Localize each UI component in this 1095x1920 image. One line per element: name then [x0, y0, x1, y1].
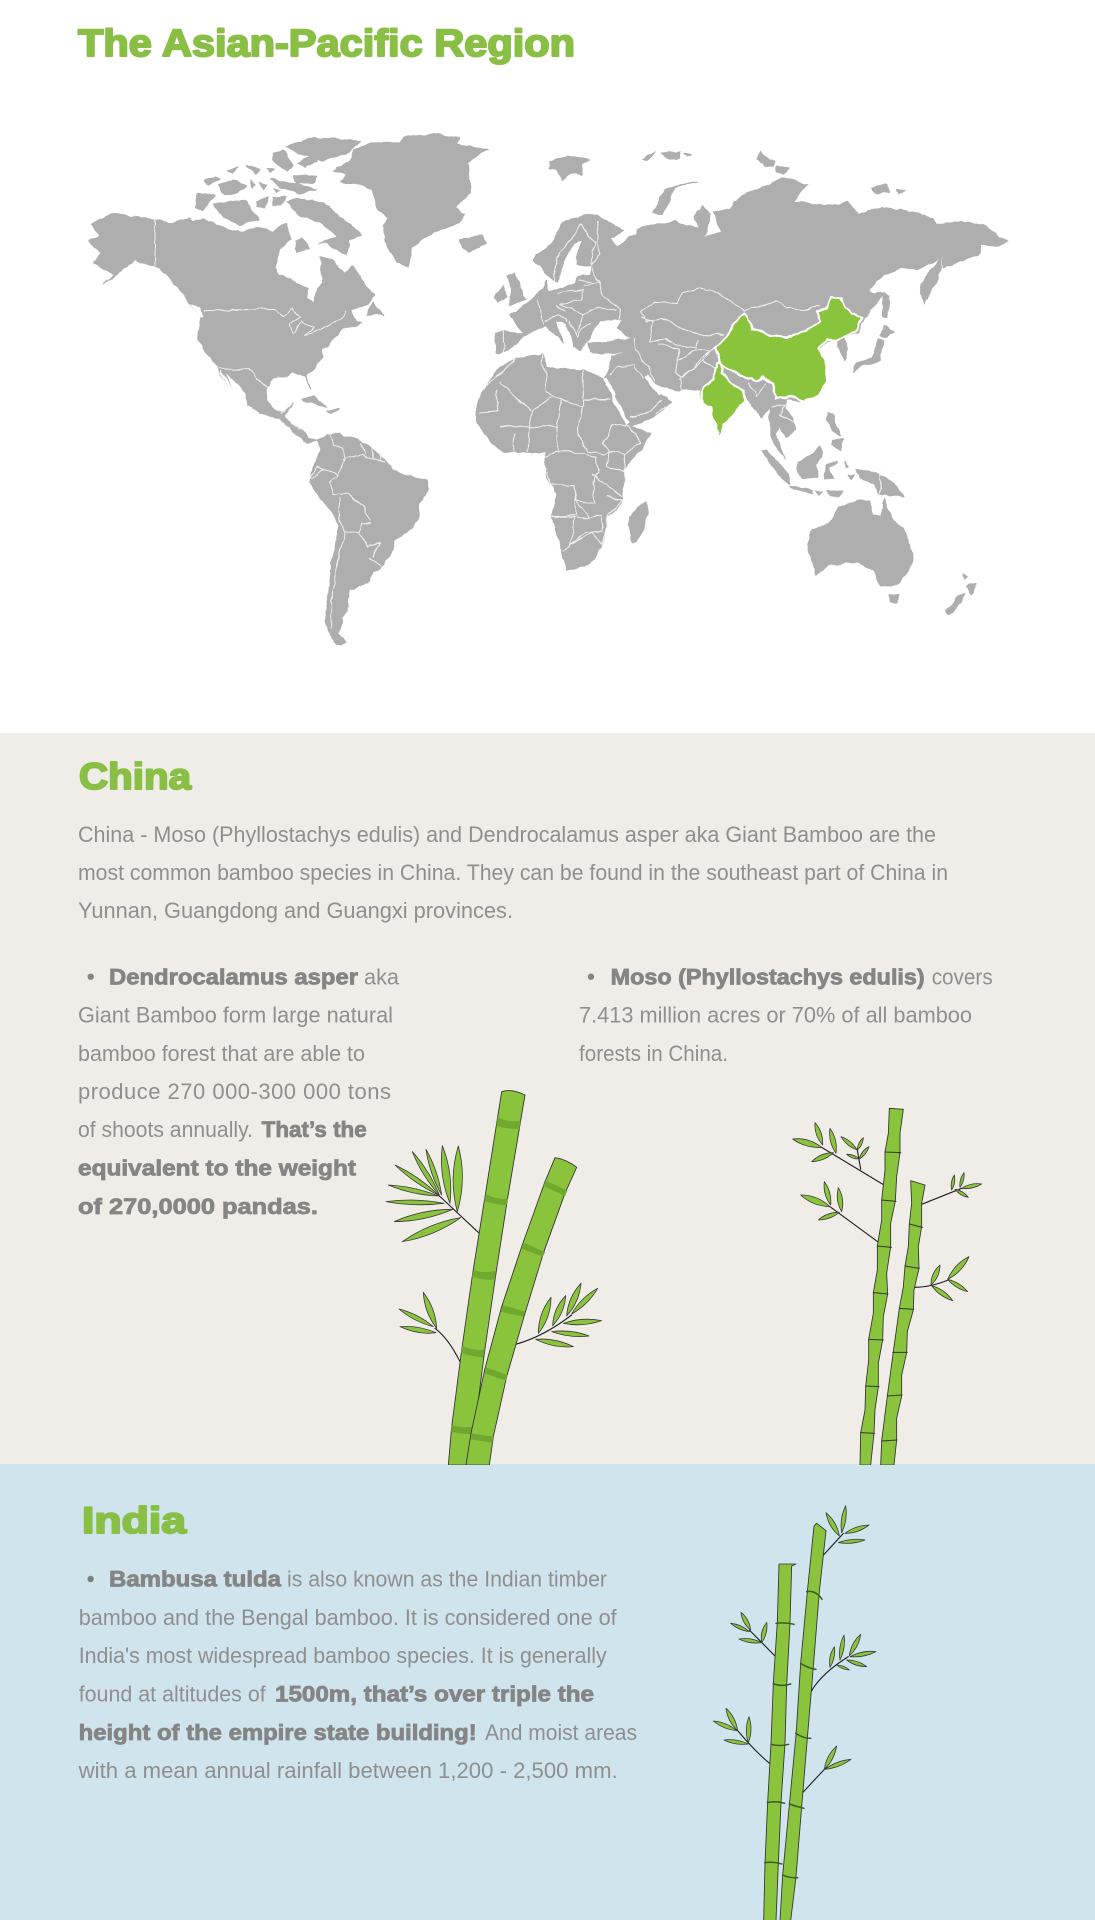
text block: dendrocalamus asper: of shoots annually.	[78, 1117, 253, 1142]
text block: bambusa tulda: is also known as the Indian timber	[287, 1567, 607, 1592]
stem two nodes	[882, 1224, 922, 1441]
text block: dendrocalamus asper: Giant Bamboo form large natural	[78, 1003, 393, 1028]
text block: china intro: most common bamboo species in China. They can be found in the southeast part of China in	[78, 860, 948, 885]
highlighted country: china	[715, 296, 863, 402]
arctic islands and caribbean	[195, 137, 525, 414]
text block: dendrocalamus asper: bamboo forest that are able to	[78, 1041, 365, 1066]
asian and oceanian islands	[549, 152, 977, 614]
text block: bambusa tulda: found at altitudes of	[79, 1682, 267, 1707]
stem one	[860, 1108, 903, 1465]
stem two	[780, 1523, 826, 1920]
short stem nodes	[471, 1181, 567, 1443]
text block: dendrocalamus asper: of 270,0000 pandas.	[78, 1194, 318, 1219]
text block: dendrocalamus asper: Dendrocalamus asper	[109, 964, 358, 990]
bamboo branches	[435, 1195, 572, 1362]
map: eurasia africa oceania	[477, 152, 1008, 614]
text block: dendrocalamus asper: produce 270 000-300 000 tons	[78, 1079, 391, 1104]
text block: dendrocalamus asper: That’s the	[262, 1117, 367, 1142]
text block: bambusa tulda: with a mean annual rainfall between 1,200 - 2,500 mm.	[78, 1758, 618, 1783]
panel: china background	[0, 733, 1095, 1465]
text block: moso: 7.413 million acres or 70% of all bamboo	[579, 1003, 972, 1028]
stem one nodes	[861, 1152, 901, 1433]
bamboo branches	[822, 1147, 962, 1287]
panel: india background	[0, 1464, 1095, 1920]
text block: dendrocalamus asper: aka	[364, 964, 400, 990]
title: The Asian-Pacific Region	[78, 23, 575, 65]
heading: india: India	[82, 1500, 187, 1541]
map: americas and atlantic	[88, 134, 525, 645]
text block: bambusa tulda: Bambusa tulda	[109, 1567, 282, 1592]
text block: bambusa tulda: bamboo and the Bengal bamboo. It is considered one of	[79, 1605, 618, 1630]
greenland	[333, 134, 488, 266]
text block: china intro: China - Moso (Phyllostachys edulis) and Dendrocalamus asper aka Giant Bamboo are the	[78, 822, 936, 847]
text block: dendrocalamus asper: equivalent to the weight	[78, 1156, 357, 1181]
illustration: giant bamboo	[386, 1091, 602, 1465]
south america landmass	[310, 434, 428, 645]
eurasia landmass	[497, 178, 1008, 459]
bamboo leaves	[386, 1146, 602, 1347]
stem one	[764, 1564, 796, 1920]
text block: bambusa tulda: height of the empire state building!	[79, 1720, 477, 1745]
stem one nodes	[765, 1623, 794, 1864]
bamboo leaves	[793, 1123, 982, 1301]
heading: china: China	[79, 756, 191, 797]
text block: china intro: Yunnan, Guangdong and Guangxi provinces.	[78, 898, 513, 923]
stem two nodes	[783, 1591, 822, 1878]
text block: dendrocalamus asper	[78, 964, 400, 1219]
world map	[88, 134, 1008, 645]
text block: moso: Moso (Phyllostachys edulis)	[611, 964, 925, 990]
seas	[603, 376, 662, 426]
bamboo branches	[738, 1533, 848, 1793]
illustration: indian timber bamboo	[713, 1506, 876, 1920]
text block: bambusa tulda	[78, 1567, 637, 1783]
highlighted country: india	[701, 361, 745, 439]
text block: bambusa tulda: India's most widespread bamboo species. It is generally	[79, 1643, 607, 1668]
text block: bambusa tulda: 1500m, that’s over triple the	[275, 1682, 594, 1707]
text block: moso	[579, 964, 993, 1066]
stem nodes	[451, 1117, 521, 1434]
text block: china intro	[78, 822, 948, 923]
north america landmass	[88, 214, 375, 443]
africa landmass	[477, 354, 650, 570]
bamboo leaves	[713, 1506, 876, 1769]
short stem	[466, 1158, 577, 1465]
text block: moso: covers	[932, 964, 993, 990]
american borders	[155, 220, 385, 629]
tall stem	[448, 1091, 525, 1465]
illustration: moso bamboo	[793, 1108, 982, 1465]
eastern borders	[479, 221, 881, 552]
text block: bambusa tulda: And moist areas	[485, 1720, 637, 1745]
stem two	[881, 1181, 925, 1465]
text block: moso: forests in China.	[579, 1041, 728, 1066]
australia	[808, 498, 913, 587]
